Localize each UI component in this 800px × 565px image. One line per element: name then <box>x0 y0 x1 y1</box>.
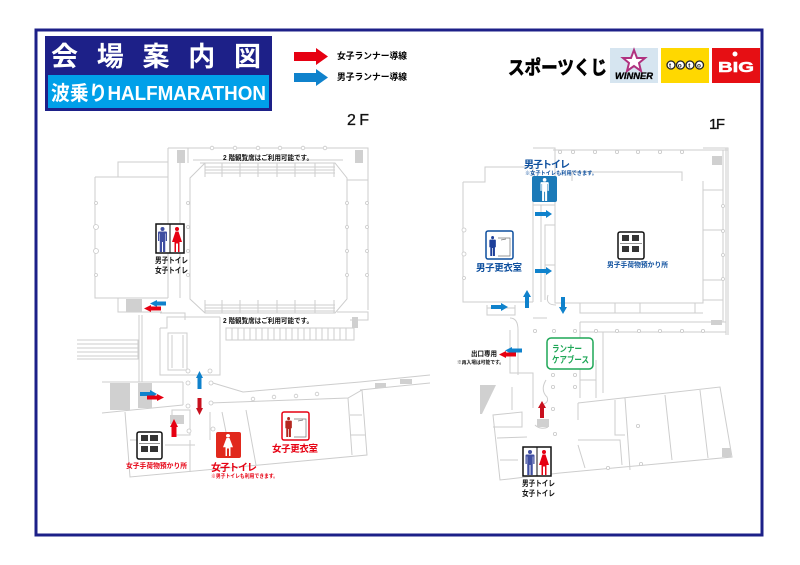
arrow: 2F blue right <box>140 390 157 398</box>
runner care booth: ケアブース <box>552 354 589 365</box>
title block <box>45 36 272 111</box>
arrow: 1F red left <box>499 351 516 358</box>
arrow: 2F red right <box>147 394 164 401</box>
arrow: 2F blue left <box>150 300 166 307</box>
legend <box>294 48 407 86</box>
icon: women's changing room <box>282 412 309 440</box>
note: no re-entry: ※再入場は可能です。 <box>457 359 504 366</box>
label: women's restroom: 女子トイレ <box>211 461 257 474</box>
arrow: 2F red left <box>144 305 161 312</box>
logo: toto: toto <box>669 62 701 70</box>
label: exit only: 出口専用 <box>471 349 497 358</box>
label: women's baggage: 女子手荷物預かり所 <box>126 461 187 470</box>
label: 1F restrooms: 男子トイレ <box>522 479 555 488</box>
icon: men's baggage <box>618 232 644 259</box>
sponsor logos: スポーツくじ <box>508 56 607 79</box>
arrow: 2F red down <box>196 398 203 415</box>
note: women's restroom available: ※女子トイレも利用できます。 <box>525 169 597 177</box>
text: lower seating note: 2 階観覧席はご利用可能です。 <box>223 316 313 325</box>
arrow: 1F blue up <box>523 290 531 308</box>
label: men's changing room: 男子更衣室 <box>476 262 522 274</box>
arrow: 1F blue right middle <box>535 267 552 275</box>
logo: WINNER <box>610 48 658 83</box>
arrow: 2F red up <box>170 419 178 437</box>
floor plan 1F <box>462 148 732 480</box>
icon: 1F restrooms <box>523 447 551 476</box>
logo: WINNER: WINNER <box>615 71 654 81</box>
text: upper seating note: 2 階観覧席はご利用可能です。 <box>223 153 313 162</box>
label: 1F restrooms <box>522 479 555 498</box>
arrow: 1F blue down <box>559 297 567 314</box>
arrow: 1F blue right lower <box>491 303 508 311</box>
logo: BIG <box>712 48 760 83</box>
floor plan 2F <box>77 146 430 477</box>
label: 2F restrooms: 女子トイレ <box>155 265 188 275</box>
icon: men's restroom <box>532 176 557 202</box>
sponsor logos <box>508 48 760 83</box>
label: men's baggage: 男子手荷物預かり所 <box>607 260 668 269</box>
icon: women's baggage <box>137 432 162 459</box>
label: women's changing room: 女子更衣室 <box>272 443 318 455</box>
label: men's restroom: 男子トイレ <box>524 159 570 171</box>
arrow: 2F blue up <box>196 371 203 389</box>
legend: 女子ランナー導線 <box>337 50 407 61</box>
event name: 波乗りHALFMARATHON <box>51 82 266 105</box>
floor label 2F: 2F <box>347 112 369 129</box>
icon: 2F restrooms <box>156 224 184 253</box>
runner care booth: ランナー <box>552 344 582 354</box>
title text: 会場案内図 <box>51 42 261 72</box>
legend: 男子ランナー導線 <box>337 71 407 82</box>
logo: toto <box>661 48 709 83</box>
floor label 1F: 1F <box>709 116 725 133</box>
runner care booth <box>547 338 593 369</box>
arrow: 1F blue left <box>505 347 522 354</box>
label: women's restroom <box>211 461 278 480</box>
label: exit only <box>457 349 504 366</box>
note: men's restroom available: ※男子トイレも利用できます。 <box>211 472 278 480</box>
logo: BIG: BIG <box>718 59 754 76</box>
label: 2F restrooms: 男子トイレ <box>155 256 188 265</box>
icon: women's restroom <box>216 432 241 458</box>
icon: men's changing room <box>486 231 513 259</box>
label: men's restroom <box>524 159 597 177</box>
arrow: 1F blue right upper <box>535 210 552 218</box>
arrow: 1F red up <box>538 401 546 418</box>
label: 2F restrooms <box>155 256 188 275</box>
label: 1F restrooms: 女子トイレ <box>522 488 555 498</box>
